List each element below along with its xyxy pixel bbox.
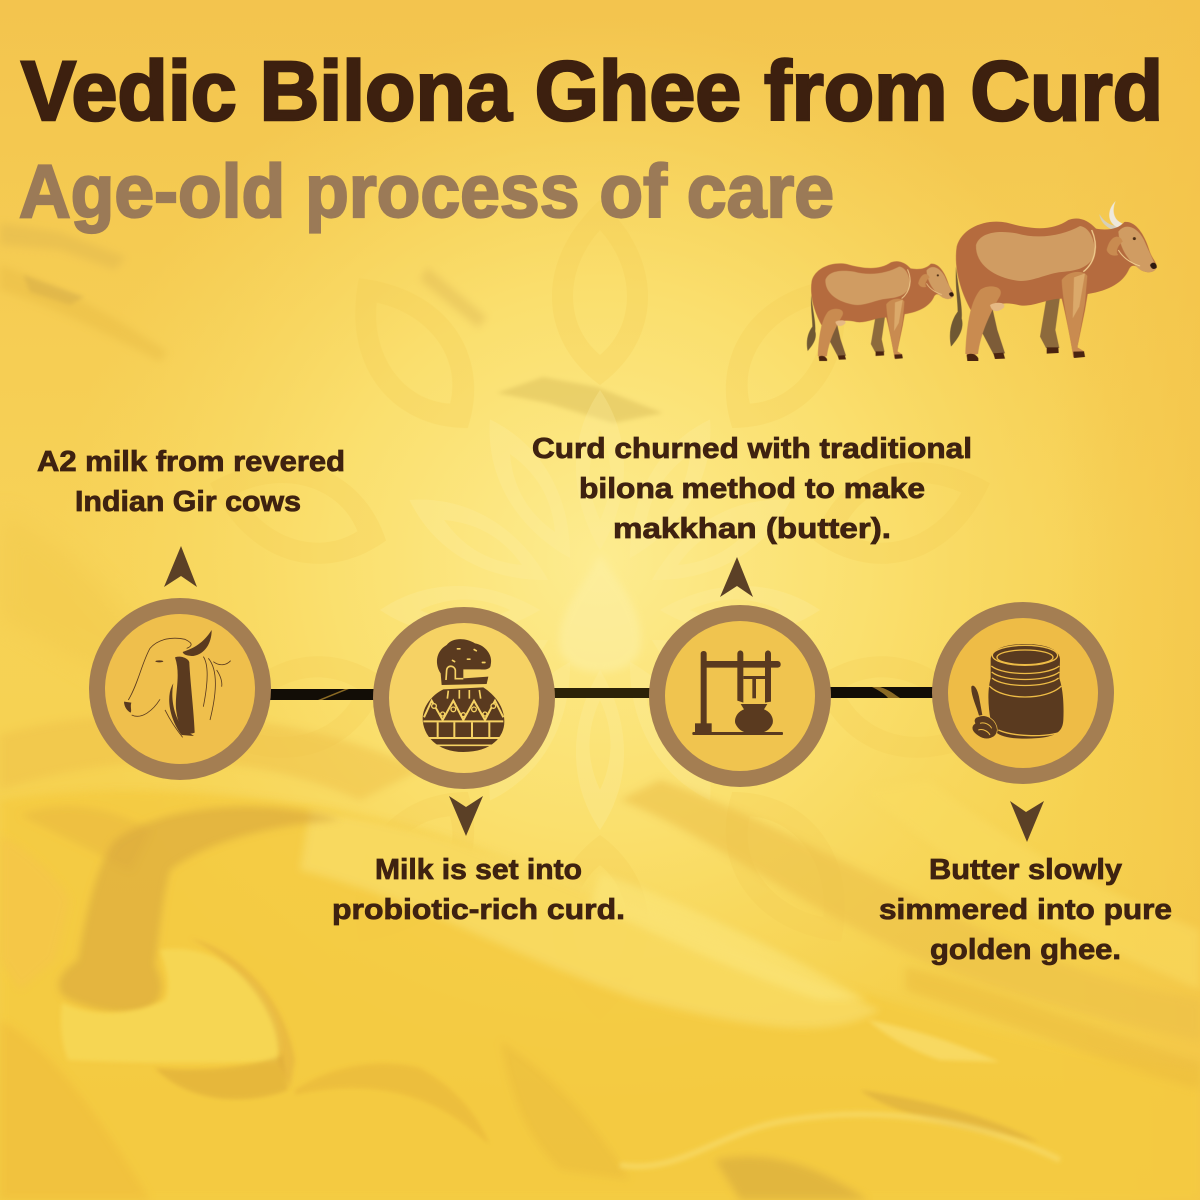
step 4 circle: ghee jar icon [940, 610, 1106, 776]
step 1 label: A2 milk from revered [37, 446, 345, 478]
arrow: step 1 up [164, 546, 197, 587]
step 2 label: probiotic-rich curd. [332, 894, 625, 926]
step 1 label: Indian Gir cows [75, 486, 301, 518]
small cow [807, 261, 954, 361]
step 2 circle: curd pot icon [381, 615, 547, 781]
step 3 label [532, 433, 972, 545]
icon: bilona churn [692, 650, 783, 735]
step 4 label [879, 854, 1172, 966]
step 2 label: Milk is set into [375, 854, 582, 886]
mandala background ornament [195, 200, 1005, 1020]
subtitle: Age-old process of care [19, 149, 834, 233]
arrow: step 2 down [449, 796, 483, 836]
step 1 label [37, 446, 345, 518]
icon: ghee jar [971, 644, 1064, 739]
step 3 label: makkhan (butter). [613, 513, 891, 545]
step 1 circle: cow head icon [97, 606, 263, 772]
arrow: step 3 up [720, 557, 753, 597]
title: Vedic Bilona Ghee from Curd [21, 44, 1163, 138]
arrow: step 4 down [1010, 801, 1044, 842]
step 3 label: bilona method to make [579, 473, 925, 505]
step 4 label: simmered into pure [879, 894, 1172, 926]
icon: curd pot [423, 639, 504, 752]
step 2 label [332, 854, 625, 926]
step 3 label: Curd churned with traditional [532, 433, 972, 465]
icon: cow head [124, 630, 231, 737]
illustration: two cows [807, 201, 1157, 361]
connector lines [268, 687, 934, 700]
step 4 label: Butter slowly [929, 854, 1122, 886]
large cow [950, 201, 1157, 361]
step 3 circle: bilona churn icon [657, 613, 823, 779]
step 4 label: golden ghee. [930, 934, 1121, 966]
